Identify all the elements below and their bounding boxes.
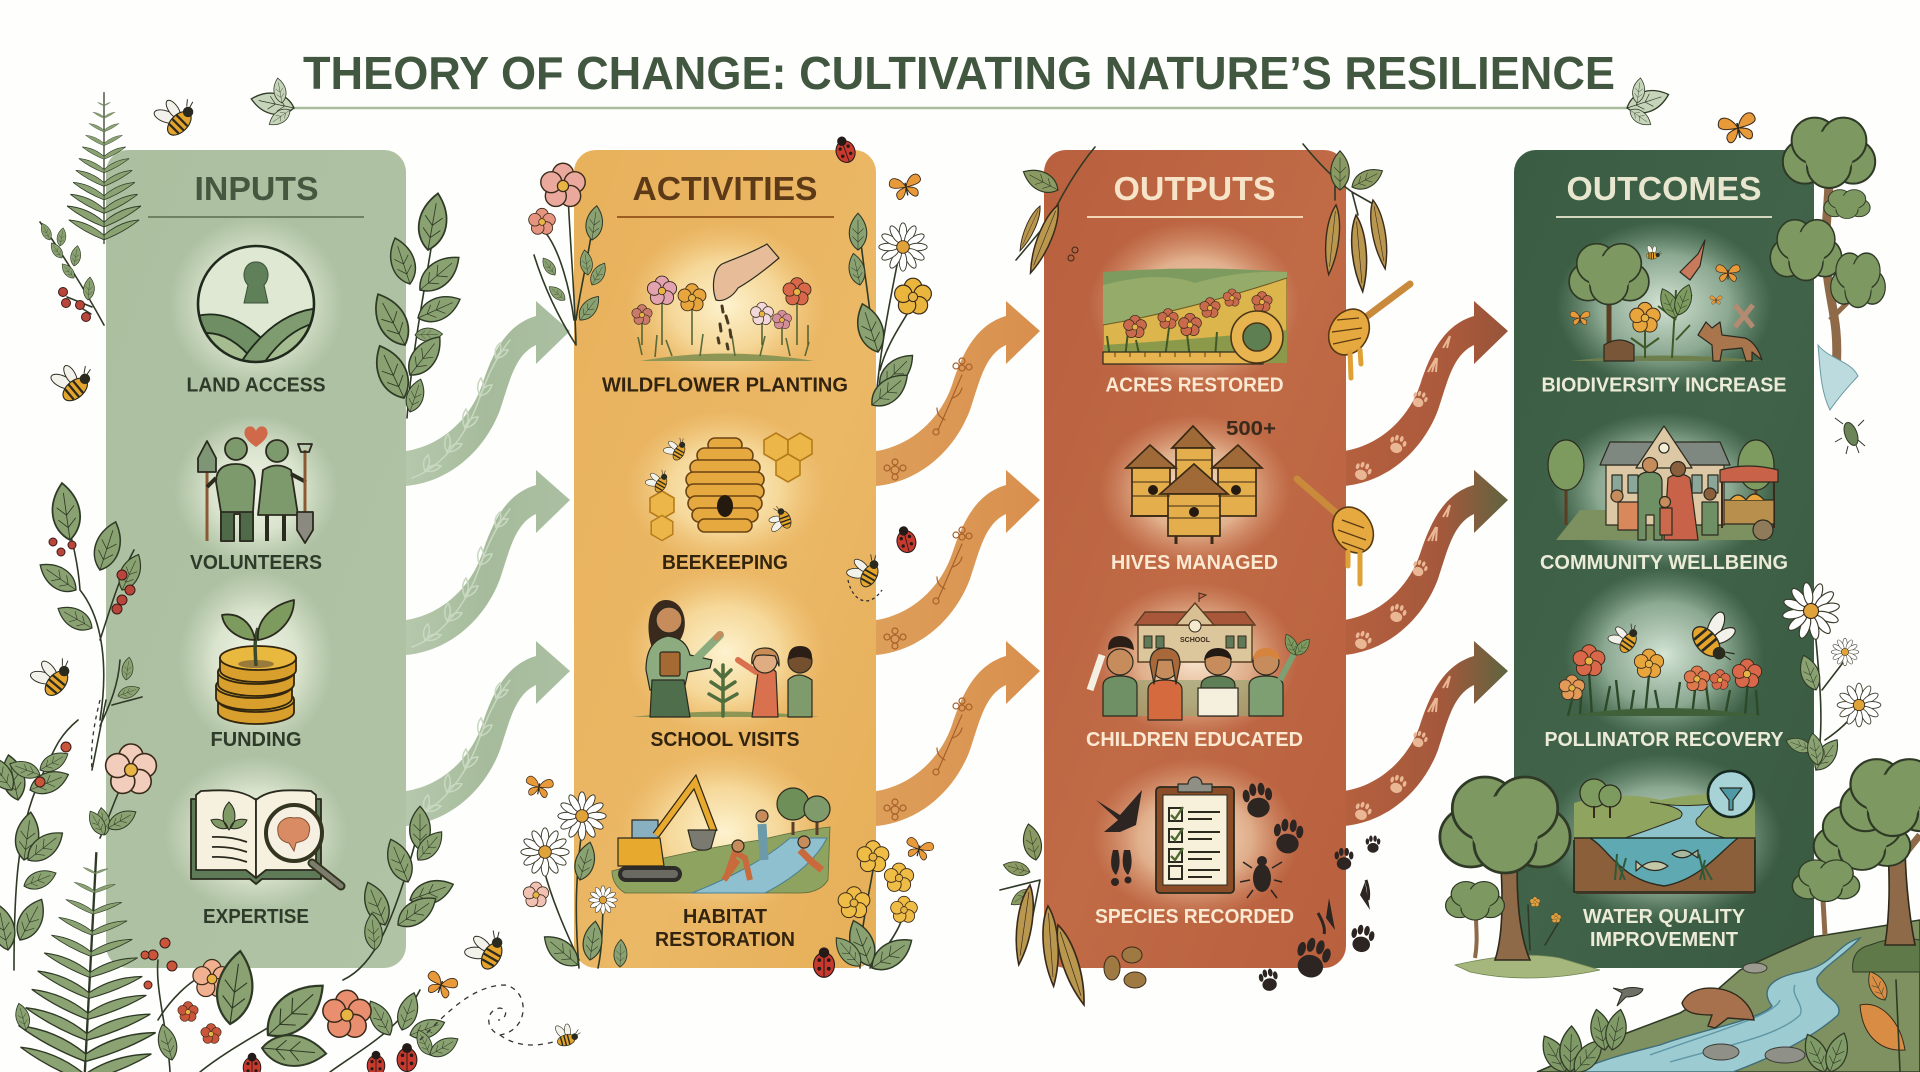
icon: land access xyxy=(176,225,335,384)
arrows: outputs to outcomes xyxy=(1344,301,1508,826)
capybara xyxy=(1682,988,1754,1028)
decoration: top-left fern and branch xyxy=(38,92,141,325)
decoration: right hill with stream and wildlife xyxy=(1536,920,1920,1072)
label: biodiversity increase: BIODIVERSITY INCREASE xyxy=(1542,374,1786,396)
icon: bee with trail on activities edge xyxy=(843,546,886,601)
arrows: inputs to activities xyxy=(406,301,570,826)
title block xyxy=(249,47,1672,129)
label: funding: FUNDING xyxy=(210,729,302,751)
decoration: activities lower flowers xyxy=(521,775,935,977)
icon: hives managed xyxy=(1099,414,1291,566)
icon: water quality improvement xyxy=(1558,759,1775,917)
icon: volunteers xyxy=(174,414,338,566)
icon: school visits xyxy=(625,568,825,736)
label: volunteers: VOLUNTEERS xyxy=(190,552,322,574)
panel: outcomes xyxy=(1514,150,1814,968)
icon: butterfly top xyxy=(888,173,924,201)
icon: children educated xyxy=(1090,582,1313,738)
icon: bee lower left xyxy=(25,646,79,700)
label: wildflower planting: WILDFLOWER PLANTING xyxy=(602,374,848,396)
icon: bee left xyxy=(46,352,100,406)
heading: activities: ACTIVITIES xyxy=(632,170,818,207)
icon: ladybug top xyxy=(831,134,858,165)
label: water quality improvement: WATER QUALITY xyxy=(1583,906,1746,928)
icon: expertise xyxy=(164,756,348,912)
icon: beekeeping xyxy=(625,410,825,566)
panel: inputs xyxy=(106,150,406,968)
icon: wildflower planting xyxy=(625,223,825,387)
label: land access: LAND ACCESS xyxy=(186,374,326,396)
heading: outcomes: OUTCOMES xyxy=(1566,170,1762,207)
decoration: activities top-left flowers xyxy=(529,163,610,345)
label: species recorded: SPECIES RECORDED xyxy=(1095,906,1294,928)
title: THEORY OF CHANGE: CULTIVATING NATURE’S RESILIENCE xyxy=(303,47,1615,99)
title underline with leaves xyxy=(249,77,1672,129)
decoration: outputs bottom pods, seeds and tracks xyxy=(1000,822,1380,1007)
fish xyxy=(1613,987,1643,1006)
small sign text: SCHOOL xyxy=(1180,637,1211,644)
panel: outputs xyxy=(1044,150,1346,968)
label: pollinator recovery: POLLINATOR RECOVERY xyxy=(1544,729,1784,751)
icon: species recorded xyxy=(1091,758,1304,918)
icon: monarch butterfly xyxy=(1717,112,1759,145)
heading: outputs: OUTPUTS xyxy=(1114,170,1276,207)
heading: inputs: INPUTS xyxy=(194,170,318,207)
panel: activities xyxy=(574,150,876,968)
decoration: activities right flowers xyxy=(846,213,931,413)
decoration: left middle branch with berries xyxy=(34,481,147,770)
icon: habitat restoration xyxy=(612,750,830,914)
decoration: lower-left branch and pink flower xyxy=(0,720,156,970)
icon: honey dipper upper xyxy=(1321,284,1410,378)
label: community wellbeing: COMMUNITY WELLBEING xyxy=(1540,552,1788,574)
label: school visits: SCHOOL VISITS xyxy=(650,729,800,751)
arrows: activities to outputs xyxy=(876,301,1040,826)
stream xyxy=(1577,938,1860,1072)
icon: biodiversity increase xyxy=(1556,221,1772,389)
icon: ladybug middle xyxy=(893,524,918,555)
label: habitat restoration: RESTORATION xyxy=(655,929,795,951)
decoration: right daisies xyxy=(1774,574,1881,775)
icon: pollinator recovery xyxy=(1559,569,1764,741)
dark bush xyxy=(1853,938,1920,972)
number: 500+: 500+ xyxy=(1226,418,1276,440)
icon: honey dipper lower xyxy=(1297,479,1381,584)
decoration: bottom-left fern xyxy=(15,849,165,1072)
label: children educated: CHILDREN EDUCATED xyxy=(1086,729,1303,751)
label: habitat restoration: HABITAT xyxy=(683,906,767,928)
label: expertise: EXPERTISE xyxy=(203,906,309,928)
label: acres restored: ACRES RESTORED xyxy=(1106,374,1284,396)
label: water quality improvement: IMPROVEMENT xyxy=(1590,929,1738,951)
decoration: inputs lower right branch xyxy=(343,806,457,980)
label: hives managed: HIVES MANAGED xyxy=(1111,552,1278,574)
decoration: bottom-left foliage and flowers xyxy=(13,921,583,1072)
decoration: top-right tree xyxy=(1770,118,1885,410)
icon: community wellbeing xyxy=(1548,412,1778,568)
path: dashed flight trail xyxy=(92,700,100,770)
decoration: lower-left tree on outcomes xyxy=(1440,777,1600,978)
label: habitat restoration xyxy=(655,906,795,951)
icon: funding xyxy=(178,570,334,750)
decoration: inputs upper right branch xyxy=(366,191,466,418)
icon: acres restored xyxy=(1097,228,1292,382)
label: beekeeping: BEEKEEPING xyxy=(662,552,788,574)
icon: beetle xyxy=(1835,418,1865,454)
decoration: outputs top seed pods xyxy=(1016,144,1391,292)
icon: bee top-left xyxy=(149,86,203,140)
decoration: bottom-right trees xyxy=(1792,759,1920,945)
flow arrows xyxy=(406,301,1508,826)
label: water quality improvement xyxy=(1583,906,1746,951)
